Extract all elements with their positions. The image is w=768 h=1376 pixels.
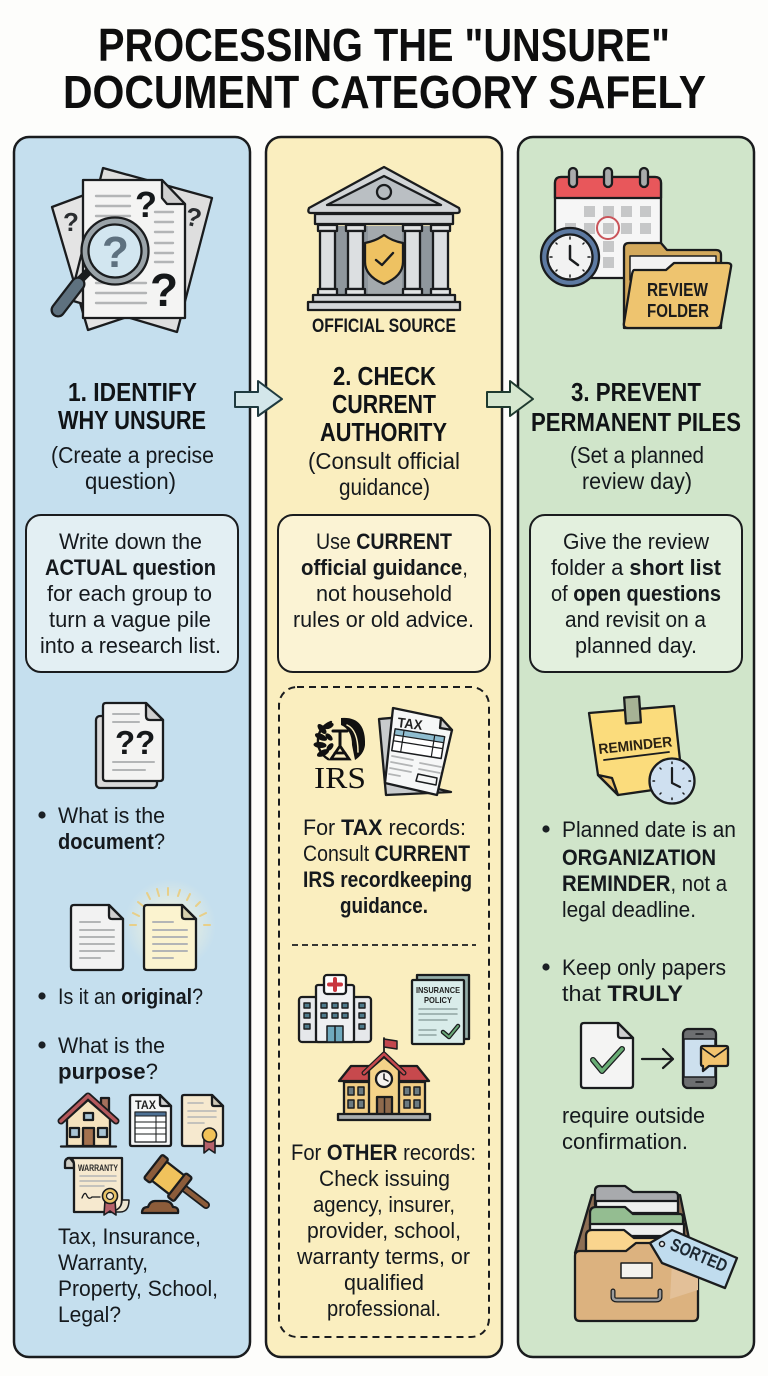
heading: step 2: guidance) [339, 474, 430, 500]
callout: write down the question [26, 515, 238, 672]
bullet: what is the purpose: purpose? [58, 1059, 158, 1084]
panel: step 2 check current authority [266, 137, 502, 1357]
heading: step 3: (Set a planned [570, 442, 704, 468]
icon: pile of unsure documents with magnifier: ? [102, 228, 129, 277]
bullet: planned date [542, 817, 736, 922]
icon: gavel [142, 1154, 206, 1213]
heading: step 1: 1. IDENTIFY [68, 379, 197, 407]
bullet: planned date: Planned date is an [562, 817, 736, 842]
panel: dashed sources box [279, 687, 489, 1337]
callout: give the review folder a short list: of open questions [551, 581, 721, 606]
callout: use current official guidance: rules or old advice. [293, 607, 474, 632]
arrow: step 1 to step 2 [235, 381, 282, 416]
text: purpose categories: Tax, Insurance, [58, 1224, 201, 1249]
text: other records: Check issuing [319, 1166, 450, 1191]
icon: sorted file drawer [575, 1186, 737, 1321]
icon: pile of unsure documents with magnifier: ? [150, 264, 178, 316]
heading: step 1 [51, 379, 214, 494]
icon: school [338, 1038, 430, 1120]
bullet: keep only papers [542, 955, 726, 1006]
heading: step 2: 2. CHECK [333, 363, 436, 391]
icon: certificate with seal [182, 1095, 223, 1153]
text: require outside confirmation: confirmation. [562, 1129, 688, 1154]
bullet: is it an original: Is it an original? [58, 984, 203, 1009]
heading: step 3: PERMANENT PILES [531, 409, 741, 437]
callout: give the review folder a short list: planned day. [575, 633, 697, 658]
icon: warranty scroll: WARRANTY [78, 1163, 118, 1173]
callout: write down the question: turn a vague pile [49, 607, 211, 632]
icon: official building with shield [308, 167, 460, 310]
text: tax records: For TAX records: [303, 815, 466, 840]
icon: calendar, clock and review folder: FOLDER [647, 300, 709, 321]
text: other records: qualified [344, 1270, 424, 1295]
icon: calendar, clock and review folder [541, 168, 731, 328]
label: official source: OFFICIAL SOURCE [312, 316, 456, 337]
text: purpose categories [58, 1224, 218, 1327]
callout: give the review folder a short list: folder a short list [551, 555, 721, 580]
icon: house [61, 1096, 116, 1146]
heading: step 3: review day) [582, 468, 692, 494]
icon: tax form [130, 1095, 171, 1146]
icon: document with question marks [96, 703, 163, 788]
heading: step 3 [531, 379, 741, 494]
callout: write down the question: into a research list. [40, 633, 221, 658]
callout: use current official guidance [278, 515, 490, 672]
text: purpose categories: Legal? [58, 1302, 121, 1327]
icon: copy and glowing original document [71, 879, 216, 971]
icon: sorted file drawer: SORTED [667, 1234, 730, 1276]
text: require outside confirmation: require outside [562, 1103, 705, 1128]
icon: insurance policy [412, 975, 469, 1044]
icon: IRS emblem [313, 718, 366, 795]
bullet: keep only papers: that TRULY [562, 981, 683, 1006]
bullet: planned date: legal deadline. [562, 897, 696, 922]
icon: IRS emblem: IRS [314, 760, 366, 795]
callout: give the review folder a short list [530, 515, 742, 672]
callout: use current official guidance: not household [316, 581, 452, 606]
icon: pile of unsure documents with magnifier [52, 168, 212, 332]
heading: step 1: question) [85, 468, 176, 494]
text: other records: agency, insurer, [313, 1192, 455, 1217]
callout: write down the question: for each group to [47, 581, 212, 606]
heading: step 2: AUTHORITY [320, 419, 447, 447]
icon: pile of unsure documents with magnifier: ? [63, 207, 79, 237]
text: purpose categories: Property, School, [58, 1276, 218, 1301]
text: require outside confirmation [562, 1103, 705, 1154]
icon: pile of unsure documents with magnifier: ? [183, 201, 204, 234]
callout: use current official guidance: official guidance, [301, 555, 468, 580]
icon: tax form: TAX [135, 1100, 156, 1112]
text: other records: provider, school, [307, 1218, 461, 1243]
bullet: what is the purpose: What is the [58, 1033, 165, 1058]
icon: tax form sheets [379, 708, 452, 795]
callout: give the review folder a short list: Give the review [563, 529, 710, 554]
callout: write down the question: ACTUAL question [45, 555, 216, 580]
heading: step 1: WHY UNSURE [58, 407, 206, 435]
text: tax records: guidance. [340, 893, 428, 918]
icon: warranty scroll [65, 1158, 129, 1215]
text: other records: For OTHER records: [291, 1140, 476, 1165]
heading: step 2 [308, 363, 460, 500]
heading: step 1: (Create a precise [51, 442, 214, 468]
callout: give the review folder a short list: and revisit on a [565, 607, 706, 632]
icon: pile of unsure documents with magnifier: ? [135, 184, 157, 225]
text: tax records: IRS recordkeeping [303, 867, 472, 892]
title [63, 19, 706, 118]
bullet: what is the document [38, 803, 165, 854]
callout: write down the question: Write down the [59, 529, 202, 554]
title: PROCESSING THE "UNSURE" [98, 19, 670, 71]
text: tax records [303, 815, 472, 918]
text: tax records: Consult CURRENT [303, 841, 470, 866]
icon: document with question marks: ?? [115, 724, 155, 761]
callout: use current official guidance: Use CURRENT [316, 529, 452, 554]
icon: calendar, clock and review folder: REVIEW [647, 279, 708, 300]
icon: phone with message [683, 1029, 728, 1088]
bullet: planned date: REMINDER, not a [562, 871, 727, 896]
panel: step 3 prevent permanent piles [518, 137, 754, 1357]
bullet: what is the purpose [38, 1033, 165, 1084]
title: DOCUMENT CATEGORY SAFELY [63, 66, 706, 118]
text: purpose categories: Warranty, [58, 1250, 148, 1275]
icon: insurance policy: POLICY [424, 995, 452, 1005]
text: other records [291, 1140, 476, 1321]
bullet: keep only papers: Keep only papers [562, 955, 726, 980]
arrow: step 2 to step 3 [487, 381, 533, 416]
heading: step 2: CURRENT [332, 391, 436, 419]
text: other records: professional. [327, 1296, 441, 1321]
panel: step 1 identify why unsure [14, 137, 250, 1357]
icon: reminder sticky note with clock [589, 696, 694, 804]
bullet: what is the document: What is the [58, 803, 165, 828]
bullet: planned date: ORGANIZATION [562, 845, 716, 870]
icon: hospital [299, 975, 371, 1042]
arrow: document to phone [642, 1049, 673, 1068]
bullet: what is the document: document? [58, 829, 165, 854]
text: other records: warranty terms, or [296, 1244, 470, 1269]
icon: tax form sheets: TAX [397, 714, 424, 733]
icon: reminder sticky note with clock: REMINDER [598, 734, 674, 758]
heading: step 2: (Consult official [308, 448, 460, 474]
icon: checked document [581, 1023, 633, 1088]
heading: step 3: 3. PREVENT [571, 379, 701, 407]
icon: insurance policy: INSURANCE [416, 985, 460, 995]
